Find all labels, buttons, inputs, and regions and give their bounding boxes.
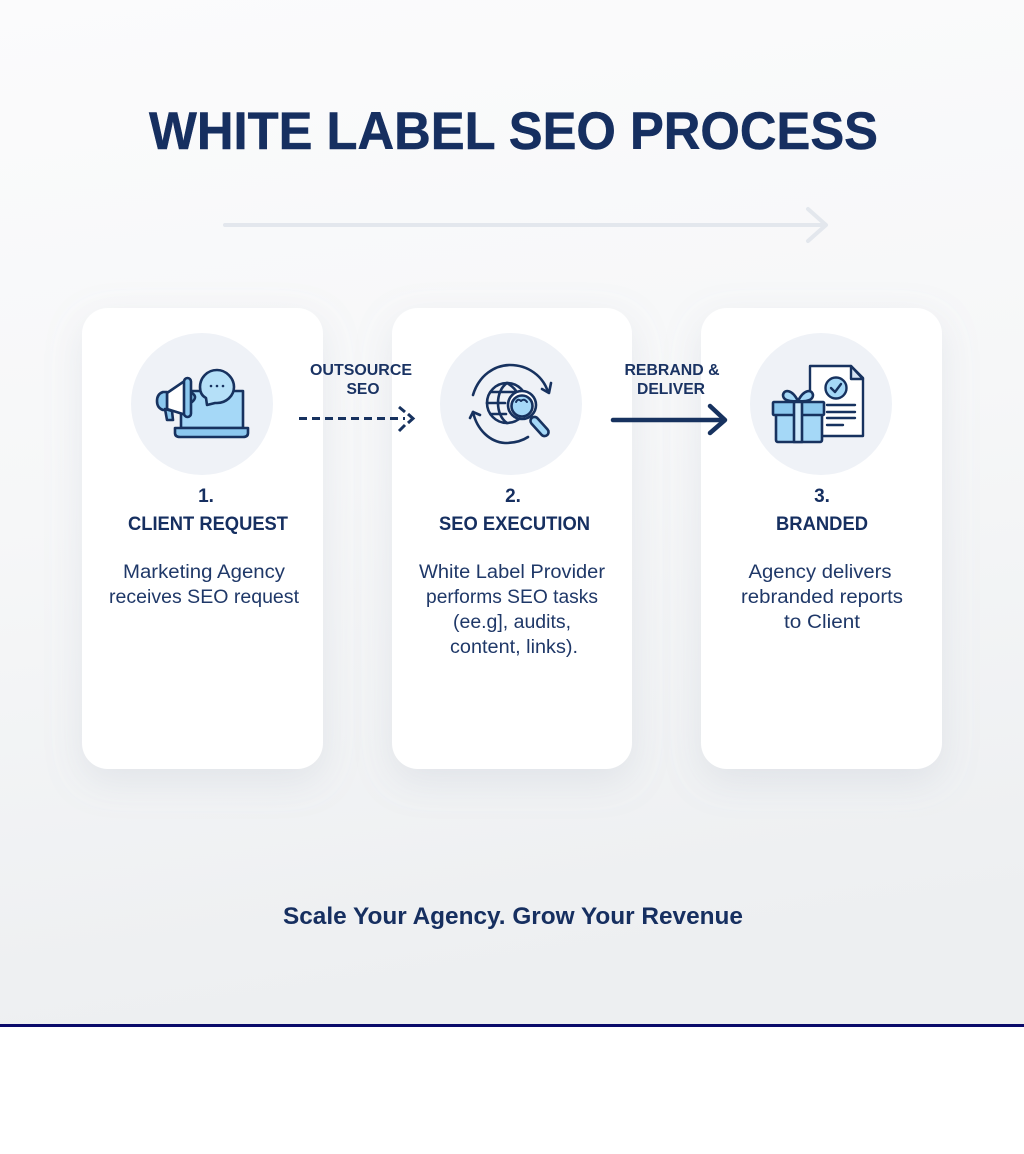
arrow: dashed outsource arrow — [299, 407, 413, 431]
icon: chat dots — [210, 385, 224, 387]
step description: Marketing Agency — [123, 562, 286, 583]
step description: content, links). — [450, 637, 578, 658]
label: rebrand and deliver — [624, 362, 720, 398]
step description: performs SEO tasks — [426, 587, 598, 608]
icon: globe and magnifier — [470, 365, 551, 443]
icon: megaphone and laptop — [157, 370, 248, 437]
label: rebrand and deliver: DELIVER — [637, 381, 705, 398]
step description: Agency delivers — [748, 562, 892, 583]
step description — [741, 562, 903, 633]
arrow: top process arrow — [225, 209, 826, 241]
step description: White Label Provider — [419, 562, 606, 583]
label: outsource SEO: OUTSOURCE — [310, 362, 412, 379]
step number 1: 1. — [198, 486, 214, 507]
icon circle: branded — [750, 333, 892, 475]
step heading: SEO EXECUTION — [439, 514, 590, 535]
step number 2: 2. — [505, 486, 521, 507]
step number 3: 3. — [814, 486, 830, 507]
icon: report document — [810, 366, 863, 436]
step description — [109, 562, 300, 608]
step description: to Client — [784, 612, 861, 633]
icon: gift box — [773, 391, 824, 442]
panel: branded — [701, 308, 942, 769]
icon circle: client request — [131, 333, 273, 475]
step heading: CLIENT REQUEST — [128, 514, 288, 535]
panel: SEO execution — [392, 308, 632, 769]
bottom rule — [0, 1024, 1024, 1027]
title: WHITE LABEL SEO PROCESS — [149, 102, 878, 161]
step description — [419, 562, 606, 658]
icon circle: SEO execution — [440, 333, 582, 475]
label: outsource SEO — [310, 362, 412, 398]
tagline: Scale Your Agency. Grow Your Revenue — [283, 903, 743, 930]
step description: (ee.g], audits, — [453, 612, 571, 633]
label: rebrand and deliver: REBRAND & — [624, 362, 720, 379]
label: outsource SEO: SEO — [346, 381, 380, 398]
arrow: solid deliver arrow — [613, 406, 725, 433]
panel: client request — [82, 308, 323, 769]
step description: rebranded reports — [741, 587, 903, 608]
step heading: BRANDED — [776, 514, 868, 535]
step description: receives SEO request — [109, 587, 300, 608]
